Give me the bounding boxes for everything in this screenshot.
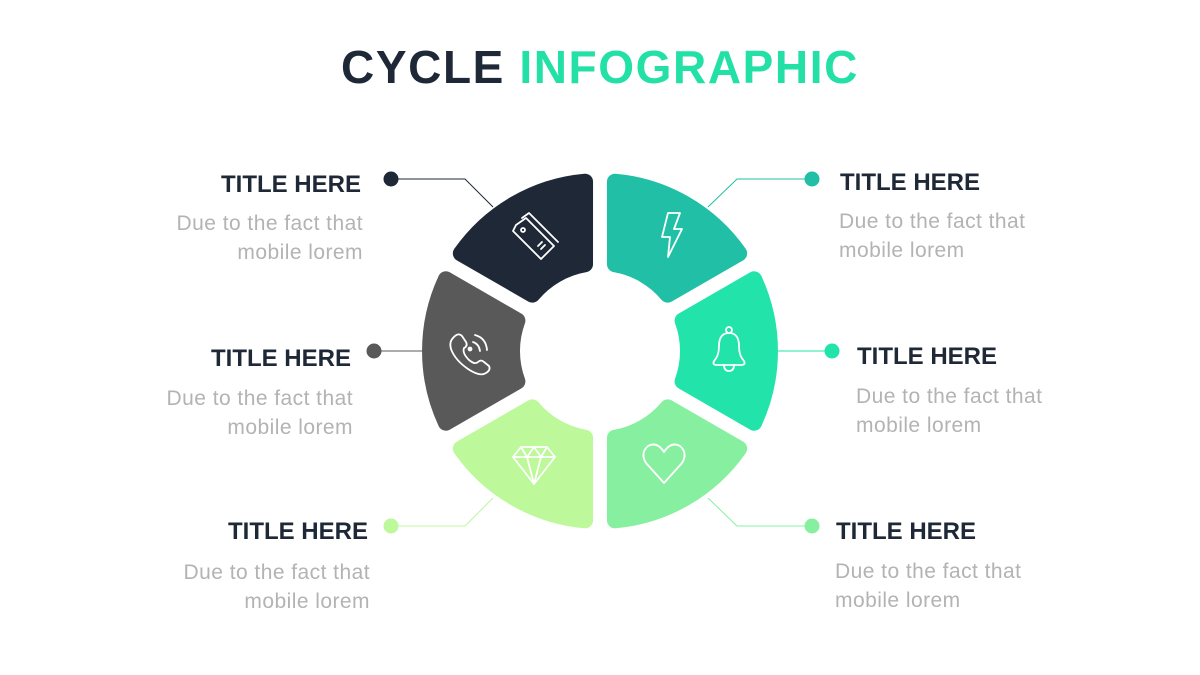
label: left: Due to the fact that [167,387,353,410]
segment: bottom-right [579,387,747,534]
label: top-left: TITLE HERE [221,171,361,198]
icon: bell [713,327,745,371]
label: bottom-right: Due to the fact that [835,560,1021,583]
label: right: Due to the fact that [856,385,1042,408]
label: left: TITLE HERE [211,345,351,372]
segment: top-right [579,168,747,315]
connector: bottom-right [708,498,819,533]
connector: left [367,344,425,358]
label: bottom-left [184,518,370,613]
segment: left [430,279,517,423]
title: CYCLE INFOGRAPHIC [341,41,859,93]
label: bottom-right [835,518,1021,612]
segment: right [683,279,770,423]
connector: bottom-left [384,498,493,533]
label: right: TITLE HERE [857,343,997,370]
label: bottom-right: mobile lorem [835,589,961,612]
label: top-left: mobile lorem [237,241,363,264]
segment: bottom-left [453,387,621,534]
connector: right [778,344,839,358]
label: top-right: mobile lorem [839,239,965,262]
cycle ring [430,168,770,534]
label: top-right [839,169,1025,262]
label: right [856,343,1042,437]
label: top-right: TITLE HERE [840,169,980,196]
label: bottom-left: mobile lorem [244,590,370,613]
label: left: mobile lorem [227,416,353,439]
icon: heart [643,444,685,483]
icon: diamond [513,447,555,484]
label: bottom-left: TITLE HERE [228,518,368,545]
label: left [167,345,353,439]
connector: top-right [708,172,819,207]
icon: tag [513,213,558,259]
icon: phone [450,334,490,374]
label: top-right: Due to the fact that [839,210,1025,233]
label: right: mobile lorem [856,414,982,437]
icon: lightning [662,213,682,257]
label: bottom-left: Due to the fact that [184,561,370,584]
connector: top-left [384,172,493,207]
label: top-left: Due to the fact that [177,212,363,235]
segment: top-left [453,168,621,315]
label: top-left [177,171,363,264]
label: bottom-right: TITLE HERE [836,518,976,545]
